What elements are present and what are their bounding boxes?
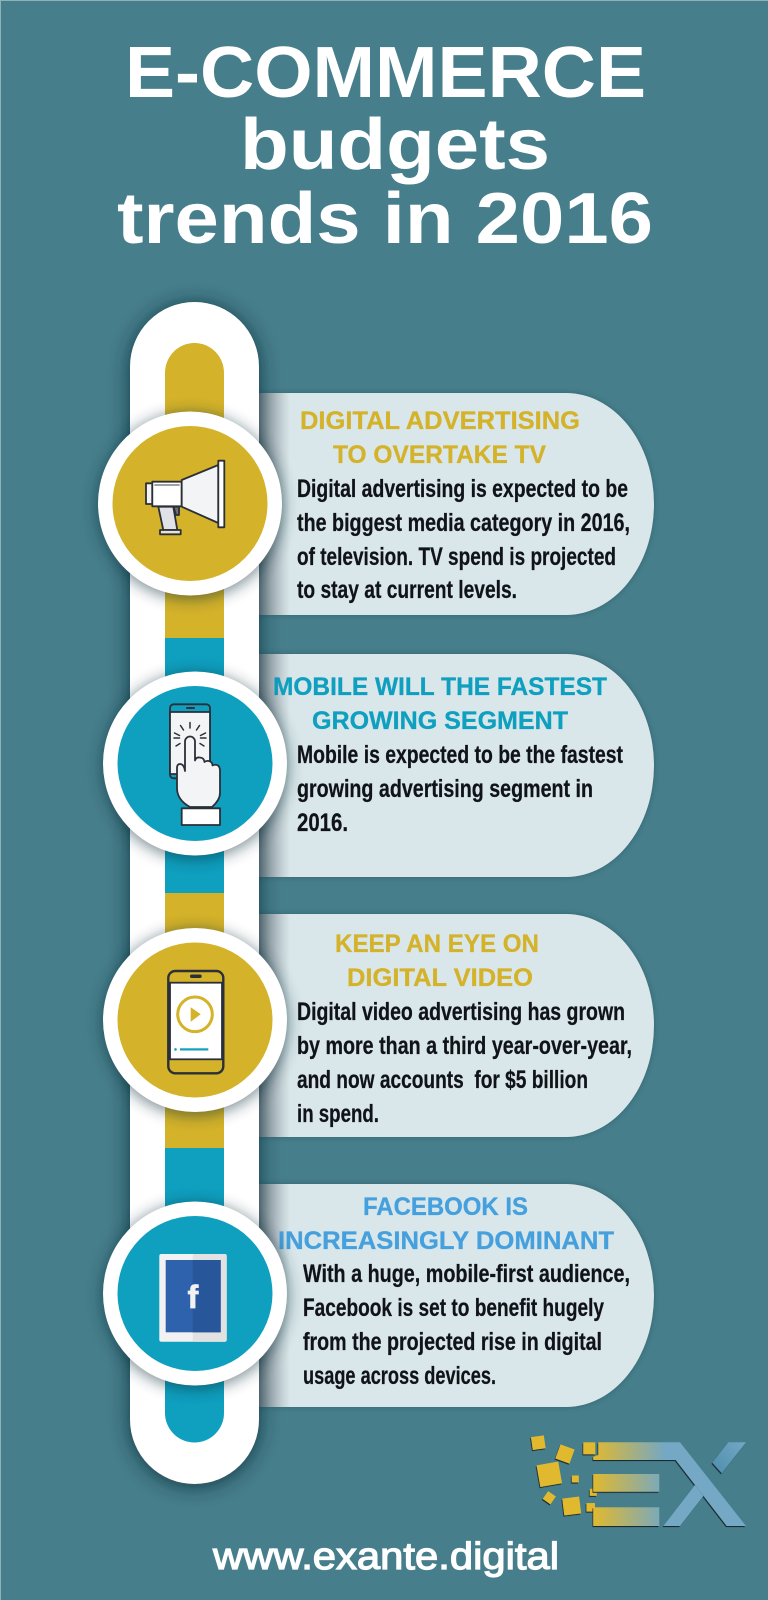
heading: facebook <box>278 1193 614 1255</box>
circle badge: video phone <box>103 928 287 1114</box>
title: E-COMMERCE <box>125 33 646 113</box>
heading: digital advertising <box>300 407 580 469</box>
heading: mobile <box>273 673 607 735</box>
circle badge: facebook tablet <box>103 1202 287 1388</box>
panel: digital video <box>255 914 654 1137</box>
heading: digital advertising: DIGITAL ADVERTISING <box>300 407 580 435</box>
title <box>117 33 653 259</box>
timeline pill <box>130 302 259 1486</box>
body text: digital video: in spend. <box>297 1100 379 1128</box>
circle badge: megaphone <box>98 412 282 598</box>
body text: digital advertising: the biggest media category in 2016, <box>297 509 630 537</box>
logo particles <box>531 1435 597 1515</box>
body text: digital advertising: of television. TV spend is projected <box>297 543 616 571</box>
heading: facebook: FACEBOOK IS <box>363 1193 528 1221</box>
body text: digital advertising <box>297 475 630 604</box>
body text: facebook: Facebook is set to benefit hugely <box>303 1294 604 1322</box>
heading: digital video: DIGITAL VIDEO <box>347 964 533 992</box>
timeline bar: gold segment 1 <box>165 343 224 638</box>
icon: megaphone <box>146 461 224 534</box>
heading: digital video: KEEP AN EYE ON <box>335 930 539 958</box>
icon: video phone <box>168 971 223 1073</box>
body text: facebook: With a huge, mobile-first audience, <box>303 1260 630 1288</box>
icon: touch phone <box>170 704 220 825</box>
body text: facebook <box>303 1260 630 1390</box>
icon: facebook tablet <box>159 1254 227 1342</box>
title: trends in 2016 <box>117 179 653 259</box>
panel: digital advertising <box>255 393 654 615</box>
logo: EX <box>531 1435 746 1526</box>
icon: facebook tablet: f <box>188 1279 199 1315</box>
timeline bar: blue segment 1 <box>165 638 224 893</box>
panel: facebook <box>255 1184 654 1407</box>
heading: mobile: MOBILE WILL THE FASTEST <box>273 673 607 701</box>
timeline bar: blue segment 2 <box>165 1148 224 1442</box>
body text: mobile: growing advertising segment in <box>297 775 593 803</box>
body text: mobile: Mobile is expected to be the fastest <box>297 741 624 769</box>
body text: mobile: 2016. <box>297 809 348 837</box>
body text: digital video: by more than a third year-over-year, <box>297 1032 632 1060</box>
body text: mobile <box>297 741 624 837</box>
body text: digital video: and now accounts for $5 billion <box>297 1066 588 1094</box>
body text: digital video <box>297 998 632 1128</box>
panel: mobile <box>255 654 654 877</box>
logo letters <box>593 1442 746 1526</box>
body text: digital advertising: to stay at current levels. <box>297 576 517 604</box>
heading: digital video <box>335 930 539 992</box>
website url: www.exante.digital <box>212 1536 559 1578</box>
heading: mobile: GROWING SEGMENT <box>312 707 568 735</box>
heading: digital advertising: TO OVERTAKE TV <box>333 441 546 469</box>
title: budgets <box>240 105 550 185</box>
timeline bar: gold segment 2 <box>165 893 224 1148</box>
heading: facebook: INCREASINGLY DOMINANT <box>278 1227 614 1255</box>
body text: facebook: from the projected rise in digital <box>303 1328 602 1356</box>
body text: digital video: Digital video advertising has grown <box>297 998 625 1026</box>
body text: digital advertising: Digital advertising is expected to be <box>297 475 628 503</box>
body text: facebook: usage across devices. <box>303 1362 496 1390</box>
circle badge: touch phone <box>103 672 287 858</box>
